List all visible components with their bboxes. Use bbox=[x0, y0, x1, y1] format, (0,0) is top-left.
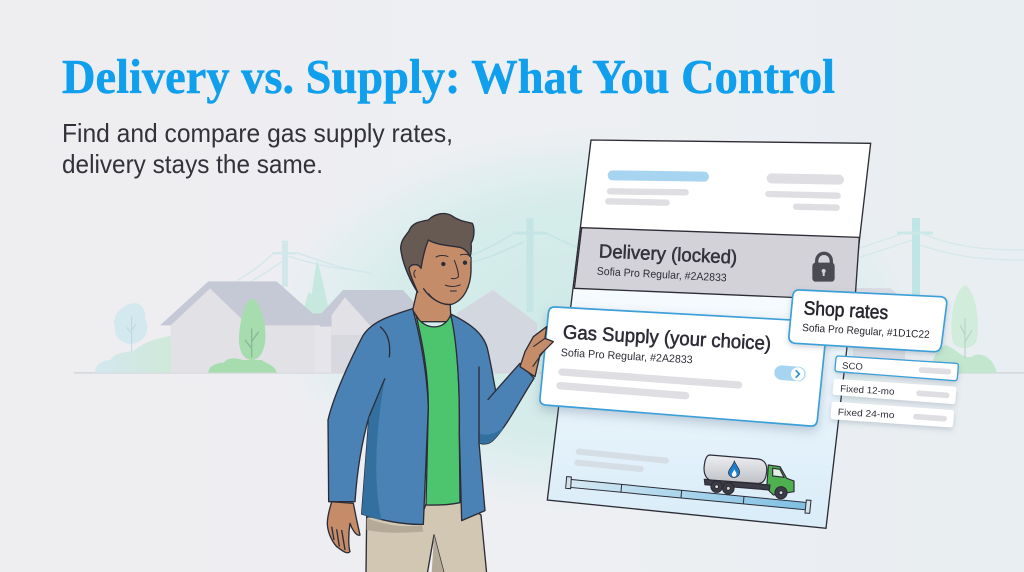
pale bushes bbox=[95, 336, 171, 373]
hair bbox=[401, 214, 474, 292]
paper sheet bbox=[547, 140, 871, 528]
bottom placeholder bars bbox=[577, 452, 666, 469]
header placeholder bars bbox=[608, 175, 839, 208]
gas pipeline bbox=[566, 477, 811, 513]
face outline bbox=[423, 257, 471, 305]
bill document bbox=[540, 140, 958, 528]
head bbox=[401, 214, 474, 305]
rate option SCO: SCO bbox=[842, 361, 863, 372]
shop rates heading: Shop rates bbox=[803, 298, 889, 324]
pale tree bbox=[114, 303, 147, 353]
tanker truck bbox=[704, 455, 794, 499]
icon: padlock bbox=[812, 253, 835, 282]
right bush bbox=[932, 345, 997, 373]
rate option fixed 12 month bbox=[833, 379, 956, 404]
right tree bbox=[951, 285, 978, 358]
utility pole left bbox=[237, 241, 370, 287]
subtitle: Find and compare gas supply rates, bbox=[62, 118, 453, 148]
trousers bbox=[366, 502, 487, 572]
delivery heading: Delivery (locked) bbox=[598, 241, 738, 269]
house three bbox=[457, 290, 537, 373]
spruce tree bbox=[303, 260, 329, 313]
background neighbourhood right bbox=[853, 218, 1024, 373]
blue jacket bbox=[328, 309, 534, 524]
shop rates card bbox=[789, 290, 947, 352]
house one bbox=[160, 281, 335, 373]
subtitle bbox=[62, 118, 453, 179]
rate option fixed 12 month: Fixed 12-mo bbox=[840, 384, 895, 397]
background neighbourhood left bbox=[74, 241, 1024, 374]
ground line bbox=[74, 372, 1024, 374]
neck bbox=[413, 275, 451, 322]
gas supply heading: Gas Supply (your choice) bbox=[562, 322, 772, 355]
title: Delivery vs. Supply: What You Control bbox=[62, 49, 835, 104]
face bbox=[409, 237, 471, 305]
gas supply note: Sofia Pro Regular, #2A2833 bbox=[560, 347, 693, 366]
rate option SCO bbox=[835, 356, 958, 381]
gas supply card bbox=[540, 307, 827, 426]
person bbox=[327, 214, 553, 572]
delivery note: Sofia Pro Regular, #2A2833 bbox=[597, 266, 727, 284]
delivery locked band bbox=[574, 228, 859, 300]
facial features bbox=[414, 254, 469, 304]
house two bbox=[320, 290, 418, 373]
house behind document bbox=[853, 288, 905, 373]
background pole centre bbox=[472, 218, 590, 312]
left hand bbox=[327, 502, 360, 553]
green tree and shrub bbox=[208, 298, 277, 373]
icon: flame bbox=[728, 461, 740, 477]
toggle switch bbox=[782, 367, 804, 381]
utility pole right bbox=[860, 218, 1024, 296]
green t-shirt bbox=[416, 315, 460, 505]
shop rates note: Sofia Pro Regular, #1D1C22 bbox=[802, 322, 930, 341]
background teal glow bbox=[260, 125, 940, 515]
right hand bbox=[520, 327, 553, 377]
rate option fixed 24 month: Fixed 24-mo bbox=[838, 407, 895, 420]
rate option fixed 24 month bbox=[831, 402, 954, 427]
subtitle: delivery stays the same. bbox=[62, 149, 323, 179]
gas supply placeholder bars bbox=[560, 372, 739, 396]
